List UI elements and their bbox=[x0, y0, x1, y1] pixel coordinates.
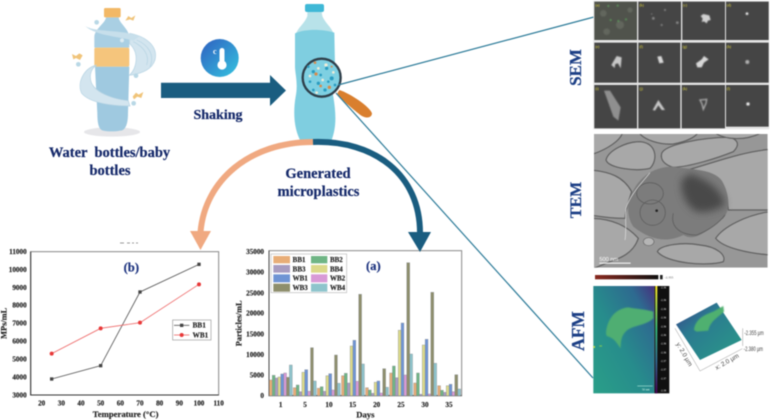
y axis ticks bbox=[9, 248, 27, 399]
AFM height map: 50 nm bbox=[642, 387, 650, 391]
y axis ticks: 5000 bbox=[12, 356, 27, 364]
AFM scale legend bbox=[654, 285, 669, 393]
x axis ticks: 15 bbox=[349, 401, 357, 409]
y axis ticks: 30000 bbox=[246, 269, 264, 277]
y axis ticks: 35000 bbox=[246, 248, 264, 256]
y axis ticks: 20000 bbox=[246, 310, 264, 318]
AFM scale legend: -2.36 bbox=[660, 350, 667, 354]
TEM scale bar: 500 nm bbox=[599, 257, 618, 263]
x axis ticks: 1 bbox=[279, 401, 283, 409]
AFM scale legend: -2.36 bbox=[660, 285, 667, 289]
chart a: particles bar chart bbox=[235, 248, 462, 419]
AFM scale legend: -2.36 bbox=[660, 307, 667, 311]
x axis ticks: 60 bbox=[117, 400, 124, 408]
y axis ticks: 10000 bbox=[246, 351, 264, 359]
legend bbox=[271, 254, 347, 293]
label: generated microplastics: Generated bbox=[285, 166, 351, 182]
SEM panel letters: (d) bbox=[727, 4, 732, 8]
SEM panel letters: (l) bbox=[727, 87, 731, 91]
legend: BB2 bbox=[330, 256, 343, 264]
x axis ticks: 5 bbox=[303, 401, 307, 409]
legend: WB1 bbox=[193, 331, 209, 339]
SEM panel letters: (c) bbox=[683, 4, 688, 8]
panel: AFM images bbox=[593, 275, 764, 393]
label: generated microplastics: microplastics bbox=[278, 184, 360, 200]
legend bbox=[173, 320, 211, 340]
series BB1 bbox=[50, 263, 201, 381]
x axis ticks: 80 bbox=[156, 400, 164, 408]
y axis ticks bbox=[246, 248, 264, 400]
TEM scale bar bbox=[599, 257, 631, 264]
x axis ticks: 10 bbox=[325, 401, 333, 409]
series WB1 bbox=[50, 282, 201, 356]
SEM panel letters: (f) bbox=[639, 45, 644, 49]
x axis ticks: 90 bbox=[176, 400, 183, 408]
y axis ticks: 15000 bbox=[246, 330, 264, 338]
y axis ticks: 5000 bbox=[250, 372, 264, 380]
y axis ticks: 10000 bbox=[9, 266, 27, 274]
x axis ticks: 50 bbox=[97, 400, 105, 408]
icon: bottle with microplastics and magnifier bbox=[294, 4, 372, 140]
legend: WB4 bbox=[330, 284, 346, 292]
bars bbox=[269, 263, 461, 396]
x axis ticks: 70 bbox=[136, 400, 144, 408]
y axis ticks: 0 bbox=[260, 392, 264, 400]
SEM panel letters: (i) bbox=[595, 87, 600, 91]
SEM panel letters: (b) bbox=[639, 4, 645, 8]
SEM panel letters: (a) bbox=[595, 4, 600, 8]
x axis ticks: 35 bbox=[445, 401, 453, 409]
mark: faint chart artefact bbox=[120, 242, 138, 244]
x axis ticks: 30 bbox=[421, 401, 429, 409]
chart letter b: (b) bbox=[124, 260, 139, 274]
heading: TEM: TEM bbox=[568, 182, 585, 218]
y axis ticks: 8000 bbox=[12, 302, 27, 310]
line: to AFM bbox=[336, 93, 593, 378]
x axis ticks: 20 bbox=[38, 400, 46, 408]
heading: AFM: AFM bbox=[568, 311, 588, 351]
icon: thermometer badge: c bbox=[213, 47, 217, 56]
AFM 3D surface bbox=[675, 303, 743, 371]
arrow: shaking bbox=[161, 75, 286, 106]
legend: BB1 bbox=[193, 322, 206, 330]
AFM scale legend: -2.38 bbox=[660, 389, 667, 393]
legend: BB1 bbox=[293, 256, 306, 264]
legend: BB3 bbox=[293, 265, 306, 273]
x axis ticks: 110 bbox=[213, 400, 224, 408]
y axis ticks: 25000 bbox=[246, 289, 264, 297]
top colour bar: -2.355 bbox=[665, 276, 674, 280]
top colour bar bbox=[595, 275, 674, 280]
SEM panel letters: (e) bbox=[595, 45, 600, 49]
x axis ticks: 20 bbox=[373, 401, 381, 409]
SEM panel letters: (h) bbox=[727, 45, 732, 49]
line: to SEM bbox=[338, 17, 594, 85]
x axis title: Temperature (°C) bbox=[93, 409, 159, 419]
SEM particles bbox=[600, 5, 750, 121]
AFM scale legend: -2.36 bbox=[660, 316, 667, 320]
arrow: curved blue to chart a bbox=[313, 142, 431, 252]
icon: water bottle with swirl bbox=[72, 8, 156, 137]
SEM panel letters: (k) bbox=[683, 87, 688, 91]
x axis ticks: 30 bbox=[58, 400, 65, 408]
x axis ticks bbox=[38, 400, 224, 408]
label: shaking: Shaking bbox=[193, 108, 243, 123]
AFM axis labels: x: 2.0 µm bbox=[714, 353, 740, 372]
AFM scale legend: -2.37 bbox=[660, 376, 667, 380]
x axis ticks: 100 bbox=[194, 400, 205, 408]
y axis ticks: 9000 bbox=[12, 284, 27, 292]
x axis ticks: 25 bbox=[397, 401, 405, 409]
AFM axis labels: y: 2.0 µm bbox=[674, 341, 693, 368]
x axis ticks: 40 bbox=[77, 400, 85, 408]
x axis ticks bbox=[279, 401, 453, 409]
y axis ticks: 11000 bbox=[9, 248, 27, 256]
legend: BB4 bbox=[330, 265, 343, 273]
chart letter a: (a) bbox=[366, 259, 381, 273]
AFM scale legend: -2.36 bbox=[660, 333, 667, 337]
SEM panel letters bbox=[595, 4, 732, 91]
panel: TEM micrograph bbox=[590, 132, 770, 270]
arrow: curved peach to chart b bbox=[190, 142, 313, 250]
chart b: temperature line chart bbox=[0, 248, 224, 419]
legend: WB3 bbox=[293, 284, 308, 292]
AFM scale legend: -2.37 bbox=[660, 359, 667, 363]
y axis ticks: 3000 bbox=[12, 391, 27, 399]
label: water bottles: Water bottles/baby bbox=[49, 145, 171, 161]
y axis title: Particles/mL bbox=[235, 300, 244, 346]
y axis ticks: 7000 bbox=[12, 320, 27, 328]
AFM scale legend: -2.36 bbox=[660, 298, 667, 302]
AFM axis labels bbox=[674, 330, 764, 372]
legend: WB2 bbox=[330, 275, 346, 283]
AFM height map bbox=[593, 286, 654, 393]
icon: thermometer badge bbox=[201, 39, 239, 77]
SEM panel letters: (j) bbox=[639, 87, 644, 91]
x axis title: Days bbox=[356, 409, 375, 419]
label: water bottles: bottles bbox=[89, 163, 131, 179]
legend: WB1 bbox=[293, 275, 308, 283]
AFM scale legend: -2.36 bbox=[660, 342, 667, 346]
SEM panel letters: (g) bbox=[683, 45, 688, 49]
panel: SEM micrographs bbox=[593, 1, 769, 129]
y axis ticks: 4000 bbox=[12, 374, 27, 382]
heading: SEM: SEM bbox=[566, 49, 585, 86]
AFM scale legend: -2.36 bbox=[660, 324, 667, 328]
AFM scale legend: -2.37 bbox=[660, 368, 667, 372]
y axis ticks: 6000 bbox=[12, 338, 27, 346]
